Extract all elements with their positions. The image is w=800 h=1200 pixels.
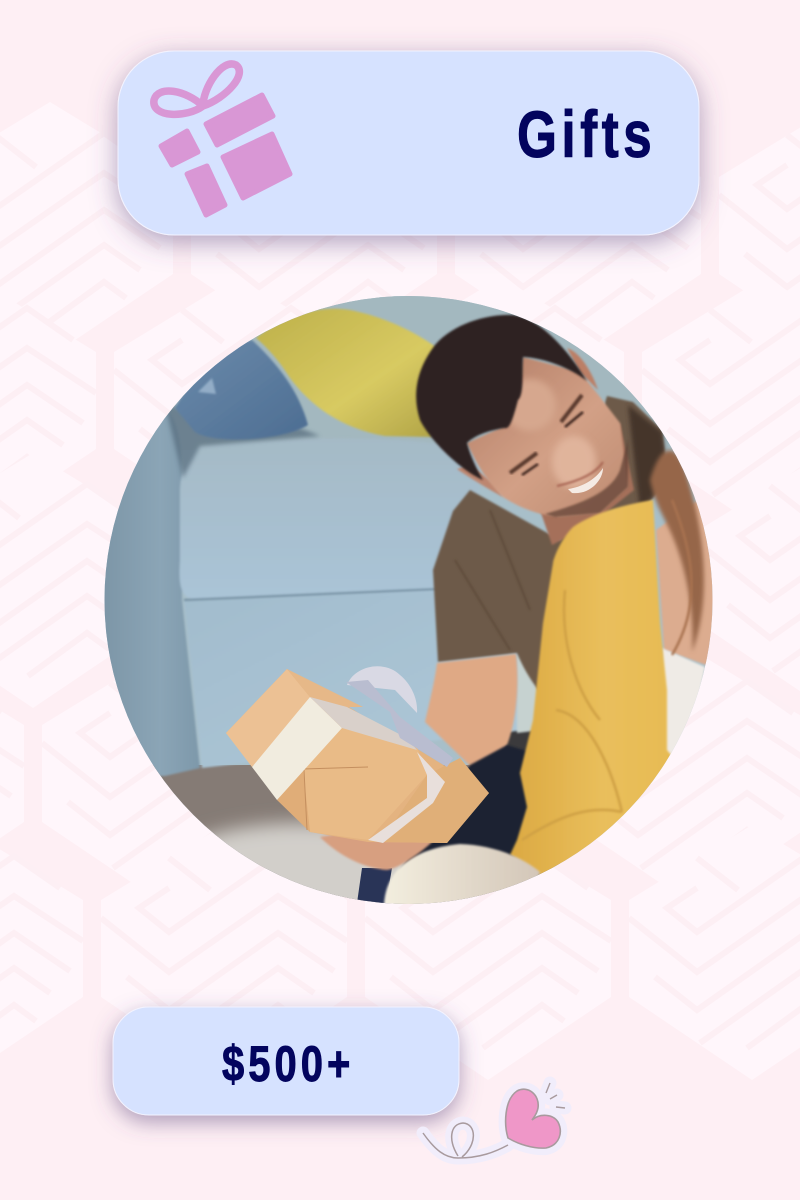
- yellow pillow: [256, 309, 440, 437]
- man's arm: [424, 652, 519, 766]
- man's hair: [416, 315, 587, 480]
- price label: $500+: [222, 1036, 354, 1092]
- floor: [153, 765, 560, 904]
- heading: Gifts: Gifts: [517, 97, 656, 171]
- dark jeans: [400, 745, 530, 870]
- blue pillow: [175, 340, 308, 439]
- man's face: [457, 348, 628, 517]
- cream trousers: [384, 844, 540, 910]
- yellow cardigan: [509, 498, 671, 875]
- icon: heart sticker with string: [423, 1083, 565, 1158]
- photo: man giving a gift, circular crop: [100, 290, 720, 947]
- hand: [320, 835, 434, 872]
- icon: gift box: [154, 64, 290, 215]
- sofa: [100, 405, 542, 776]
- wall and sofa back: [144, 296, 673, 450]
- panel: Gifts title banner: [118, 51, 699, 235]
- woman's hair: [650, 450, 704, 655]
- panel: price: [113, 1007, 459, 1115]
- gift box: [226, 666, 489, 843]
- woman's skin and top: [656, 500, 712, 666]
- ribbon: [252, 697, 342, 800]
- man's shirt: [433, 396, 668, 692]
- man's neck: [540, 423, 634, 545]
